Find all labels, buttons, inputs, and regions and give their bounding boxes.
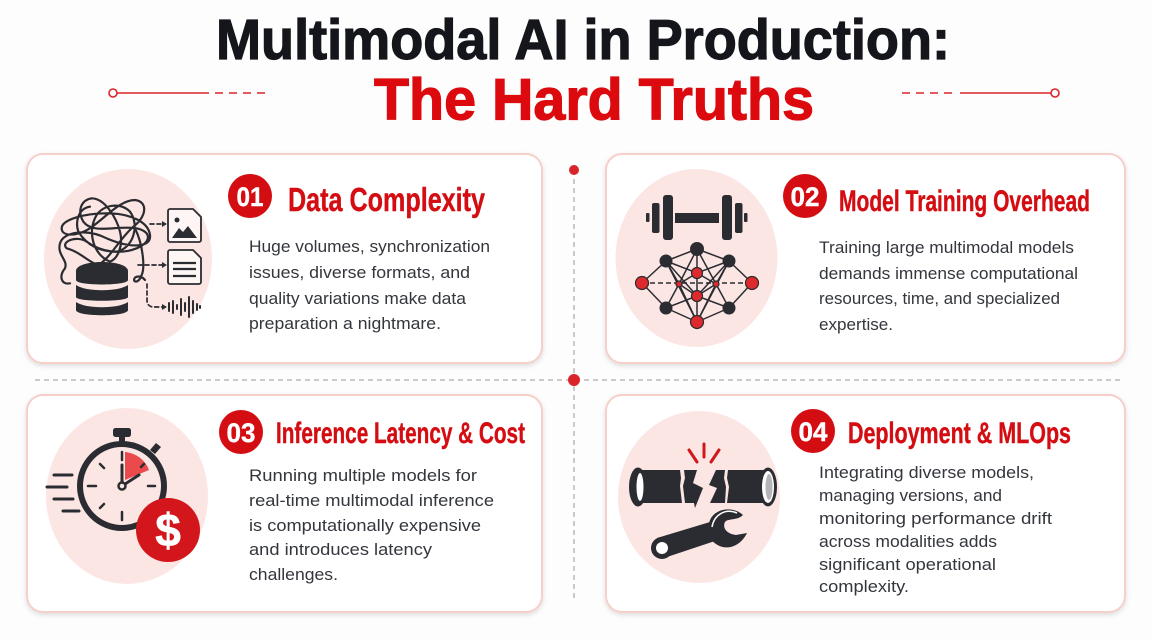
body text [819, 238, 1078, 334]
body text: real-time multimodal inference [249, 491, 494, 510]
divider node top [569, 165, 579, 175]
body text: expertise. [819, 315, 893, 334]
heading: Inference Latency & Cost [276, 417, 525, 450]
body text: Running multiple models for [249, 466, 477, 485]
divider node center [568, 374, 580, 386]
badge 02: 02 [790, 182, 820, 212]
body text [819, 463, 1052, 596]
body text: managing versions, and [819, 486, 1002, 505]
body text: is computationally expensive [249, 516, 481, 535]
body text: Training large multimodal models [819, 238, 1074, 257]
badge 01: 01 [236, 182, 264, 212]
body text: issues, diverse formats, and [249, 263, 470, 282]
body text: resources, time, and specialized [819, 289, 1060, 308]
body text: challenges. [249, 565, 338, 584]
body text: and introduces latency [249, 540, 433, 559]
body text: demands immense computational [819, 264, 1078, 283]
title: The Hard Truths [374, 68, 814, 132]
body text: Huge volumes, synchronization [249, 237, 490, 256]
badge 02 [783, 174, 827, 218]
icon: dumbbell and neural network [616, 169, 778, 347]
icon: tangled data [44, 169, 212, 349]
body text [249, 237, 490, 333]
icon: stopwatch and dollar: $ [155, 504, 181, 556]
title: Multimodal AI in Production: [216, 8, 950, 72]
badge 04: 04 [798, 417, 828, 447]
heading: Deployment & MLOps [848, 417, 1071, 450]
body text: quality variations make data [249, 289, 467, 308]
body text: complexity. [819, 577, 909, 596]
title [216, 8, 950, 132]
body text: Integrating diverse models, [819, 463, 1034, 482]
badge 03: 03 [226, 418, 256, 448]
badge 04 [791, 409, 835, 453]
header ornament left [109, 89, 267, 97]
header ornament right [902, 89, 1059, 97]
badge 03 [219, 410, 263, 454]
heading: Data Complexity [288, 181, 485, 218]
panel: inference latency and cost [27, 395, 542, 612]
panel: data complexity [27, 154, 542, 363]
body text [249, 466, 494, 584]
icon: broken pipe and wrench [618, 411, 780, 583]
body text: significant operational [819, 555, 996, 574]
body text: monitoring performance drift [819, 509, 1052, 528]
panel: model training overhead [606, 154, 1125, 363]
badge 01 [228, 174, 272, 218]
icon: stopwatch and dollar [46, 408, 208, 584]
body text: preparation a nightmare. [249, 314, 441, 333]
body text: across modalities adds [819, 532, 997, 551]
panel: deployment and mlops [606, 395, 1125, 612]
